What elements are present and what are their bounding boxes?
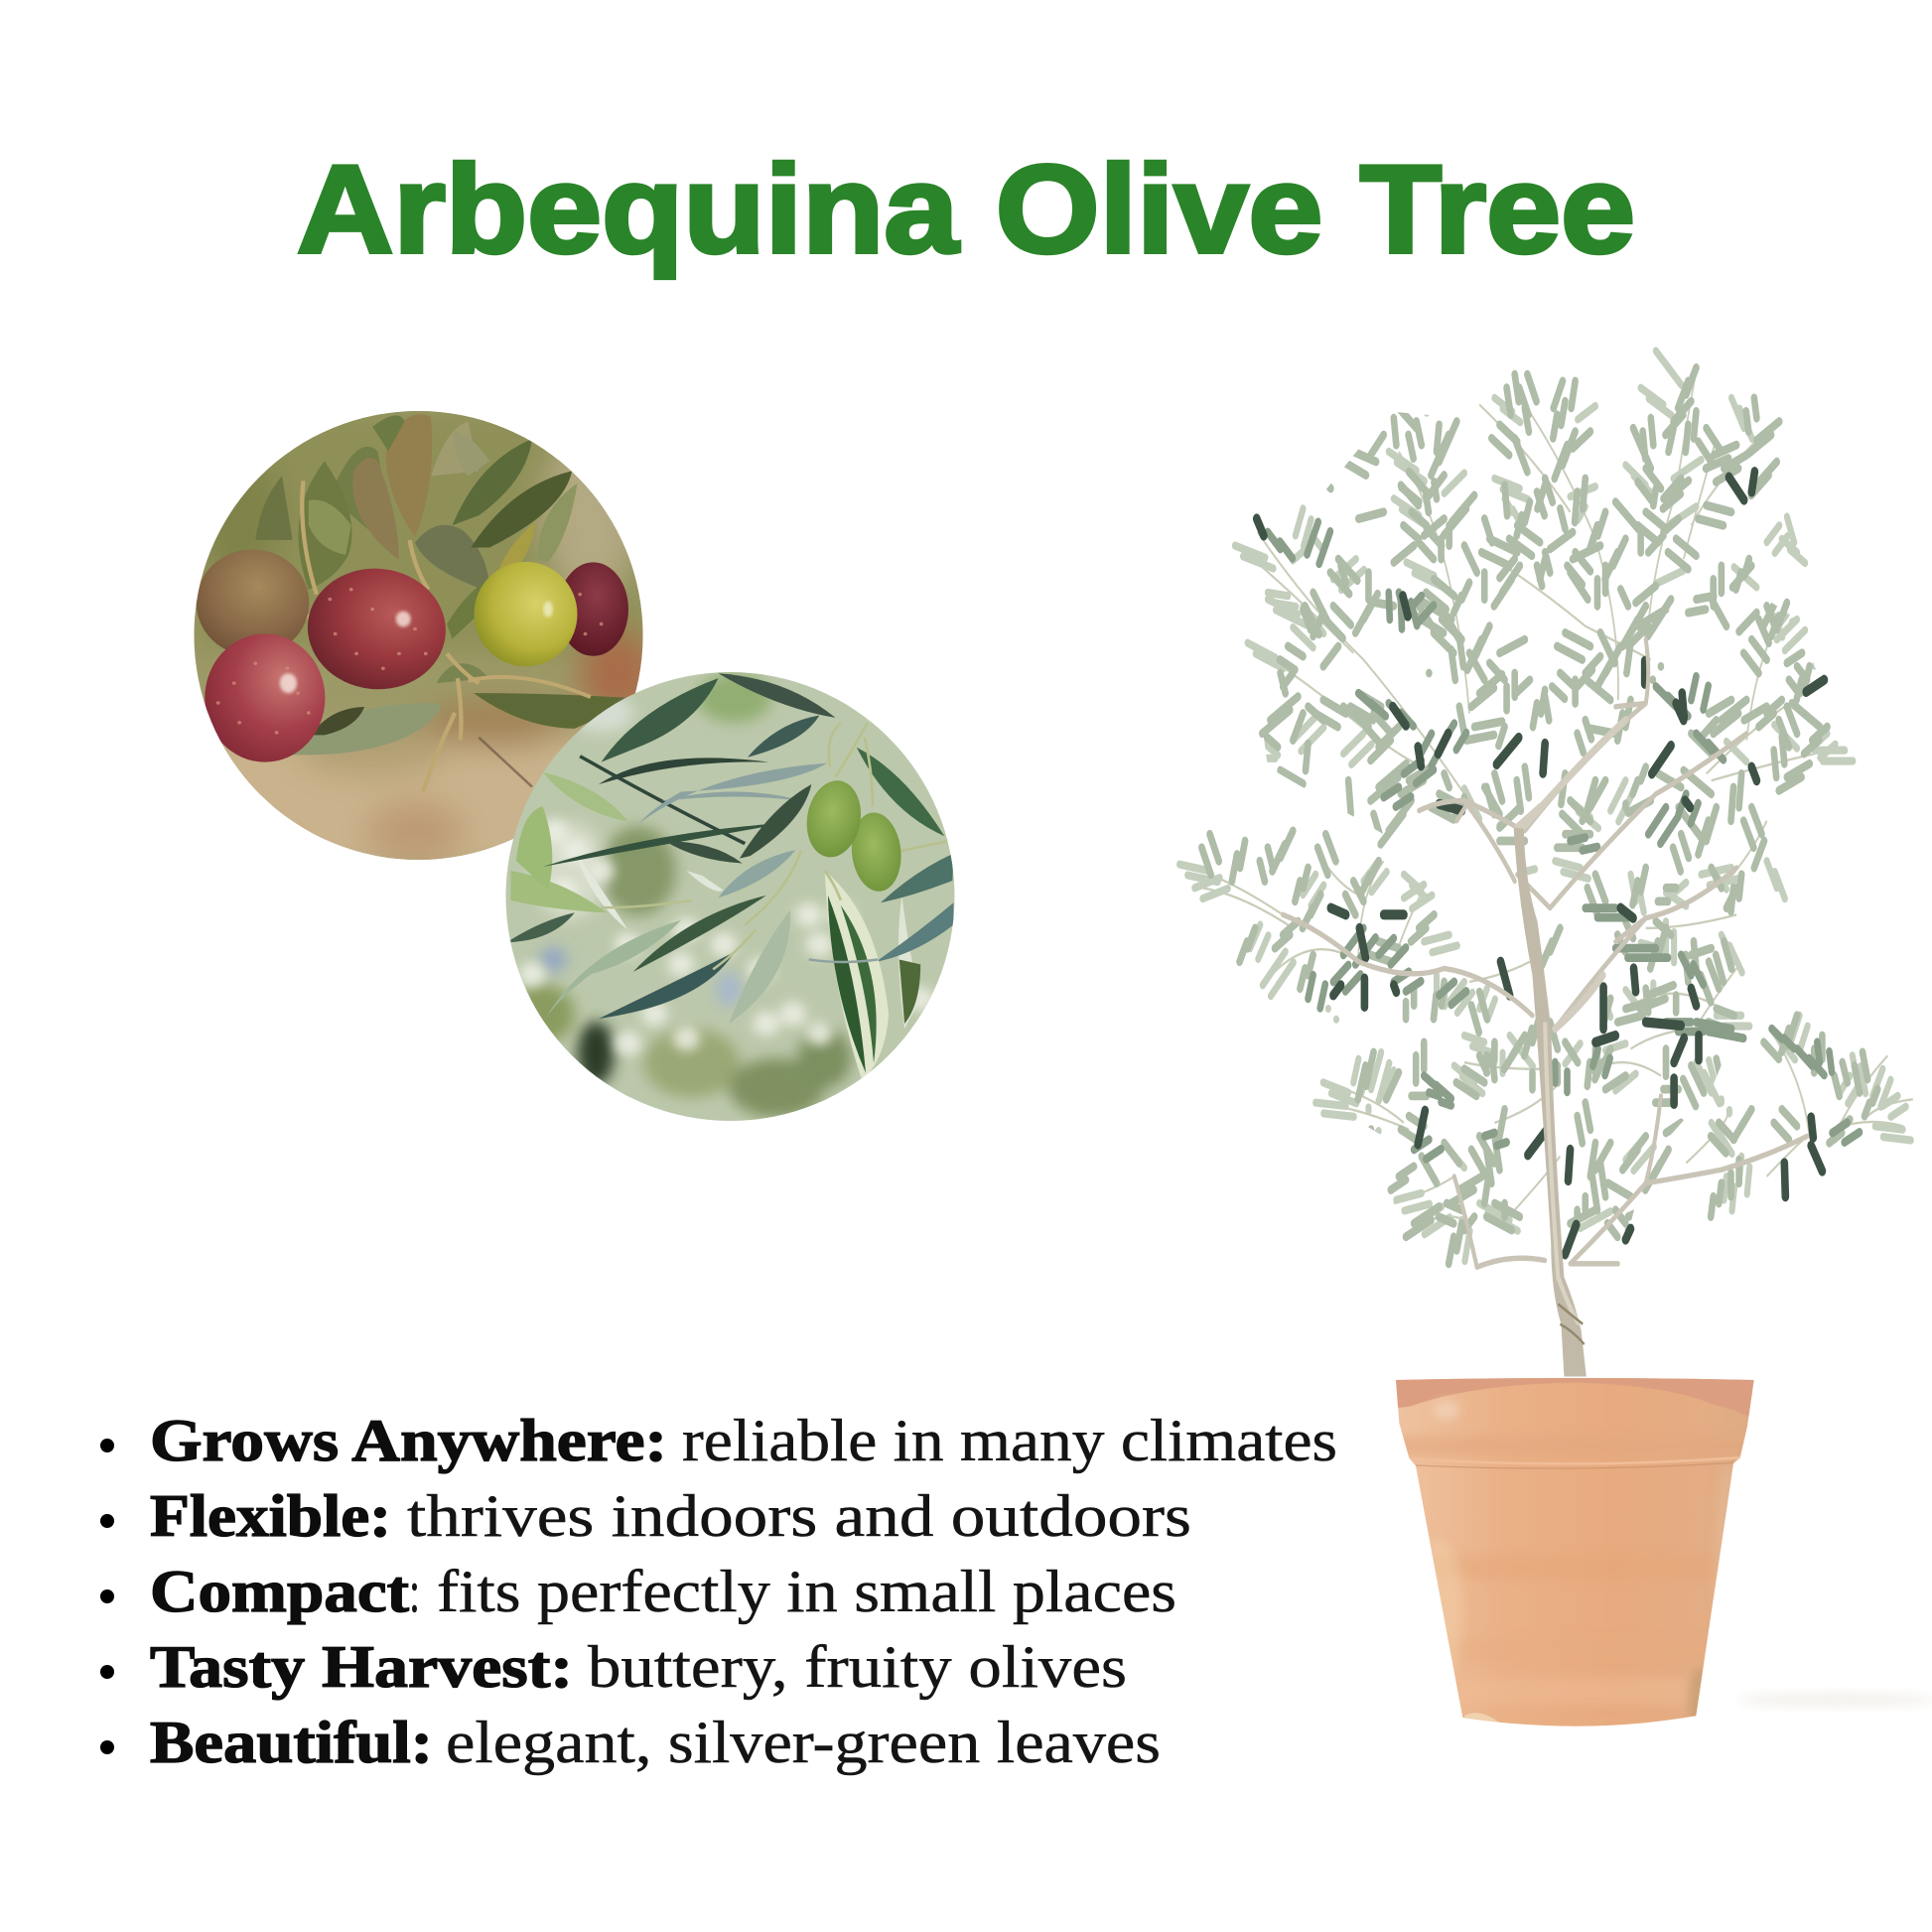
bullet: flexible: thrives indoors and outdoors bbox=[407, 1483, 1191, 1549]
pale leaves bbox=[1179, 351, 1911, 1261]
bullet: compact: fits perfectly in small places bbox=[437, 1559, 1176, 1624]
olives bbox=[558, 562, 628, 656]
olive tree in pot bbox=[1179, 351, 1932, 1737]
title: Arbequina Olive Tree bbox=[297, 139, 1635, 279]
bullet: compact: : bbox=[409, 1559, 420, 1624]
terracotta pot bbox=[1390, 1373, 1760, 1737]
photo: ripening olives circle bbox=[189, 407, 654, 871]
photo: green olives and leaves circle bbox=[501, 670, 958, 1127]
branches bbox=[1283, 639, 1807, 1267]
bullet: beautiful bbox=[100, 1710, 1161, 1775]
bullet: beautiful: Beautiful: bbox=[150, 1710, 433, 1775]
leaves bbox=[255, 476, 293, 540]
bullet: tasty harvest: buttery, fruity olives bbox=[588, 1634, 1127, 1700]
bullet: tasty harvest bbox=[100, 1634, 1127, 1700]
bullet: grows anywhere: Grows Anywhere: bbox=[150, 1408, 667, 1473]
dark leaves bbox=[1257, 472, 1824, 1254]
bullet: grows anywhere: reliable in many climates bbox=[682, 1408, 1337, 1473]
bullet: grows anywhere bbox=[100, 1408, 1337, 1473]
tree bbox=[1179, 351, 1913, 1376]
bokeh highlights bbox=[532, 831, 931, 1043]
bullet: flexible: Flexible: bbox=[150, 1483, 391, 1549]
bullet: compact bbox=[100, 1559, 1176, 1624]
floor shadow bbox=[1737, 1692, 1932, 1708]
leaves bbox=[510, 673, 953, 1080]
fine twigs bbox=[1179, 371, 1913, 1223]
twigs bbox=[602, 723, 947, 969]
bullet: beautiful: elegant, silver-green leaves bbox=[446, 1710, 1161, 1775]
inner rim bbox=[1396, 1378, 1753, 1417]
green olives bbox=[852, 812, 901, 892]
bullet: compact: Compact bbox=[150, 1559, 409, 1624]
twigs bbox=[293, 481, 591, 791]
mid sage leaves bbox=[1201, 367, 1880, 1264]
bullet: tasty harvest: Tasty Harvest: bbox=[150, 1634, 573, 1700]
feature list bbox=[100, 1408, 1337, 1775]
bullet: flexible bbox=[100, 1483, 1191, 1549]
trunk bbox=[1514, 827, 1587, 1376]
infographic canvas bbox=[100, 159, 1924, 1775]
grey-green leaves bbox=[1268, 522, 1860, 1159]
